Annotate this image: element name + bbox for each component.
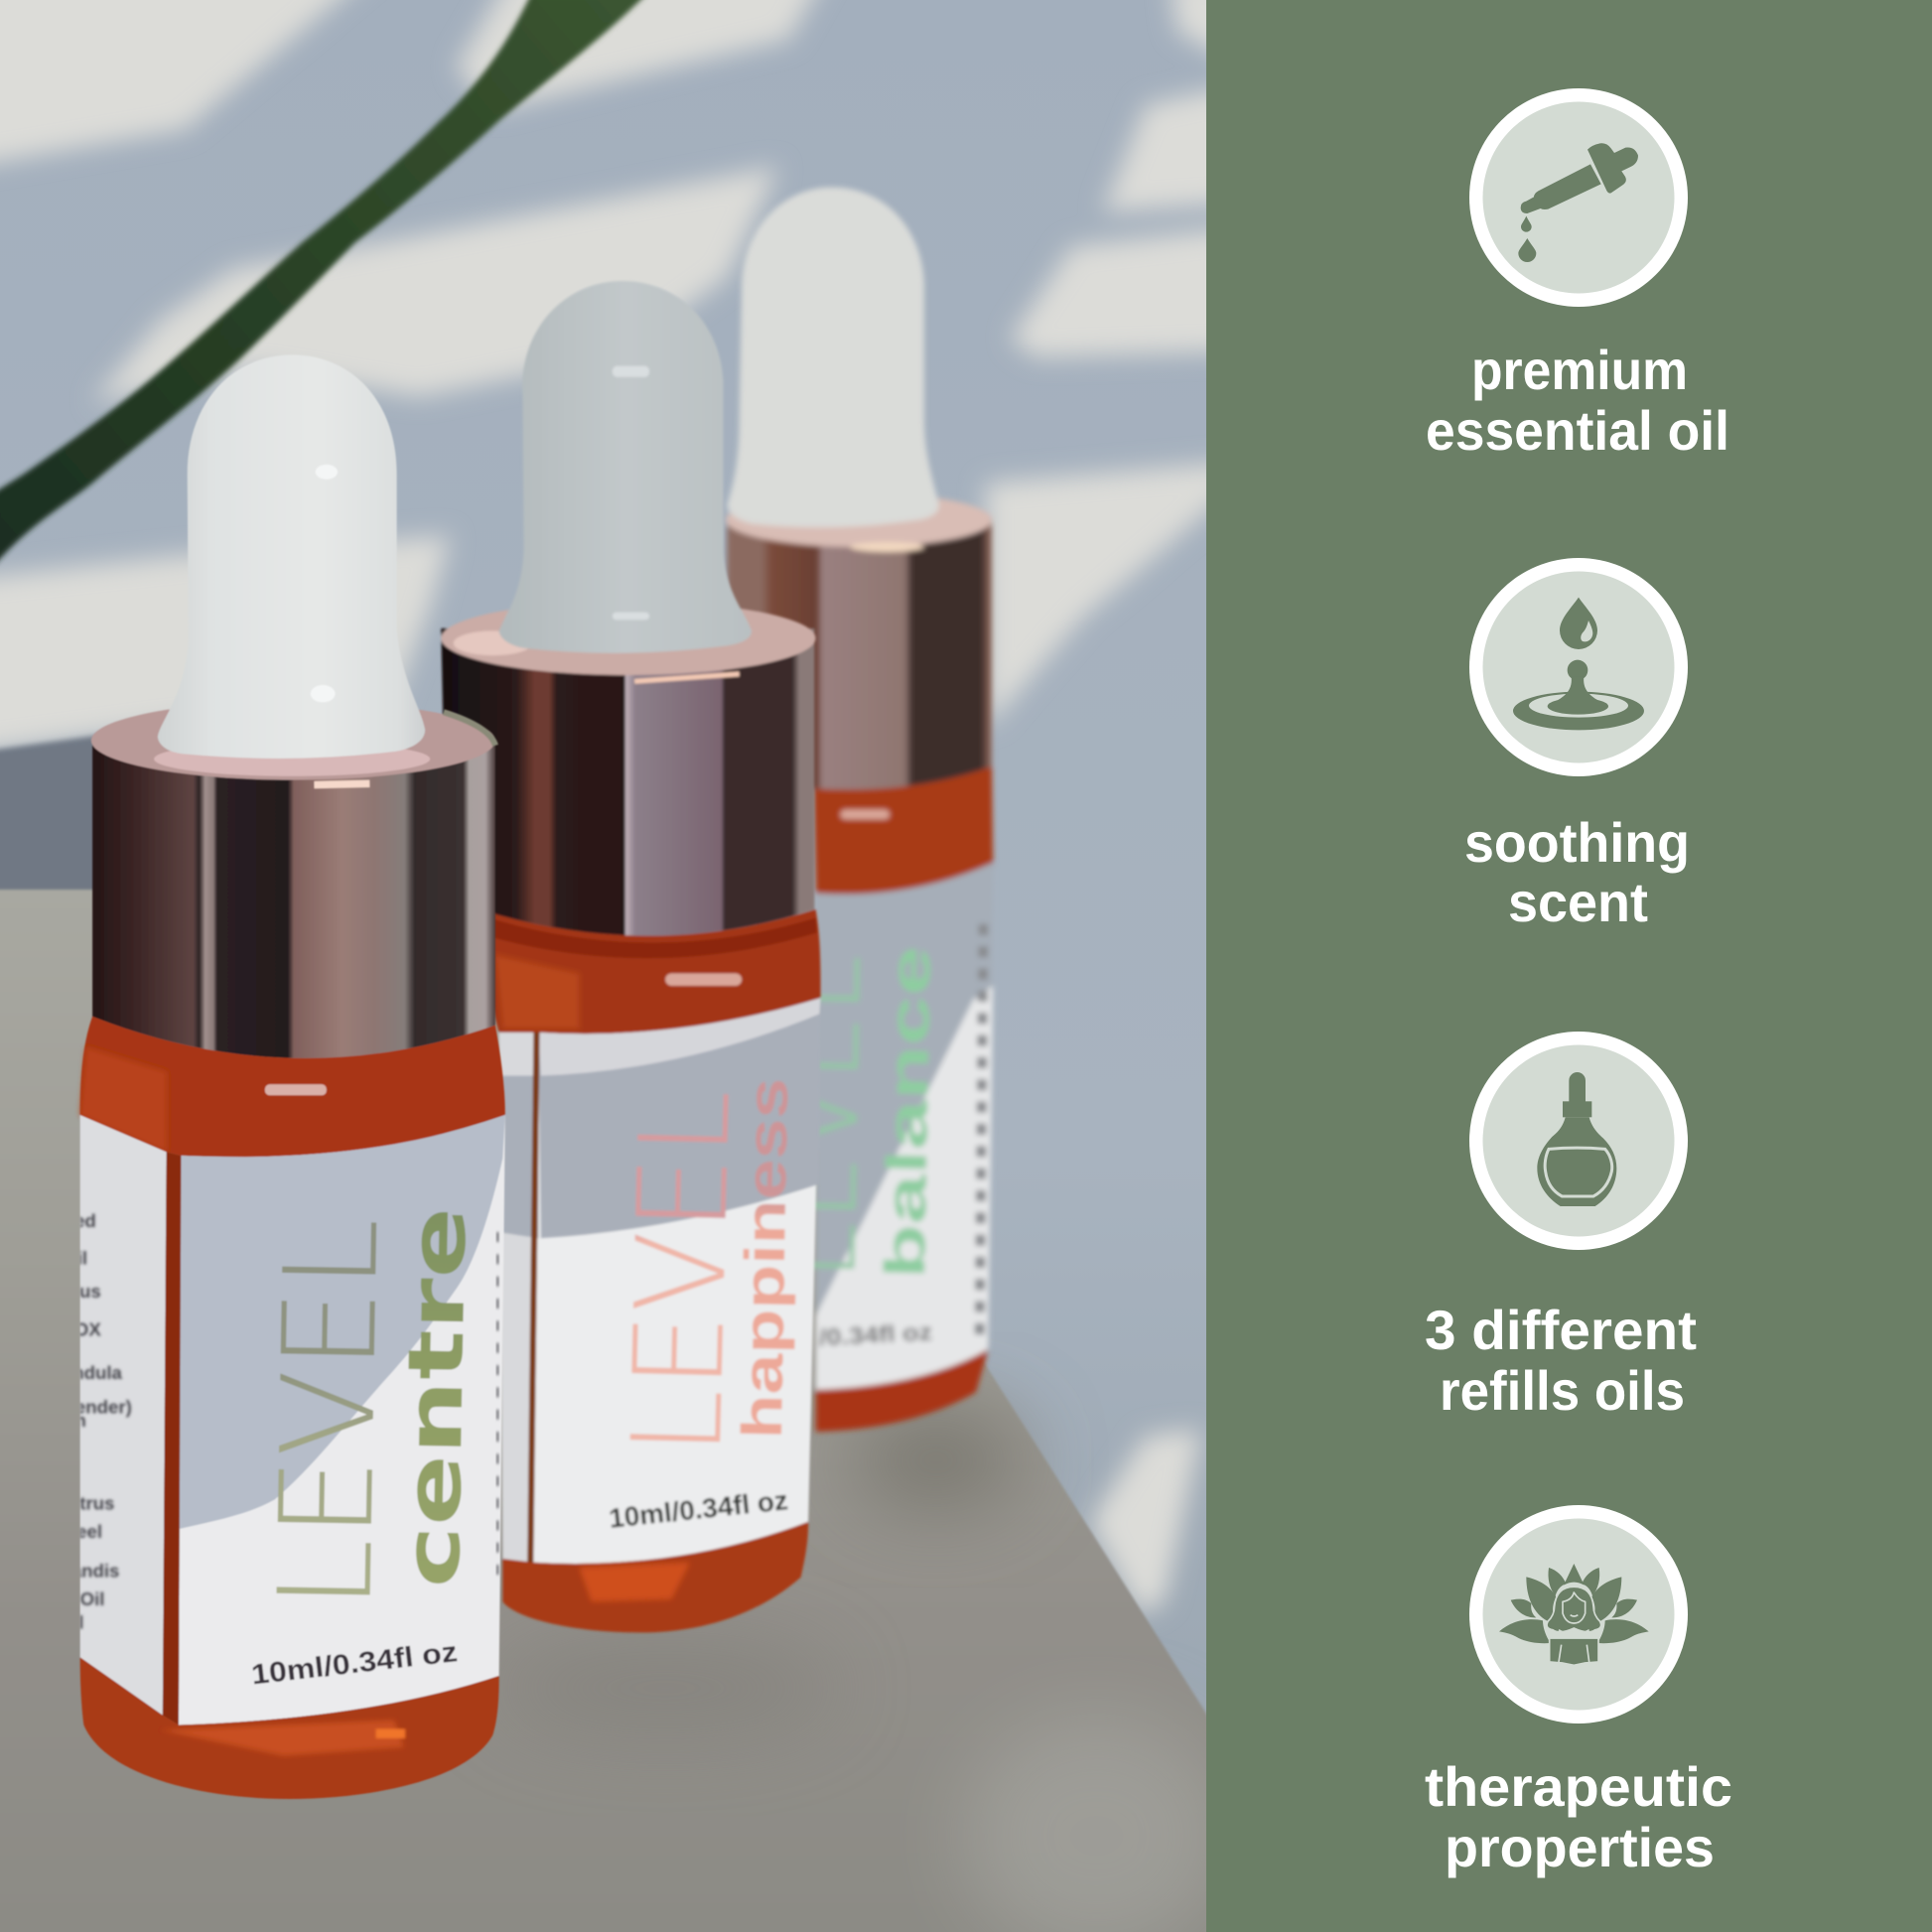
icon: oil bottle	[1469, 1032, 1688, 1250]
label: premium essential oil: premium	[1471, 339, 1688, 401]
front bottle back-label text: (lavender)	[44, 1397, 132, 1418]
rear bottle label	[814, 858, 997, 1312]
table	[0, 890, 1232, 1932]
panel: green features sidebar	[1206, 0, 1932, 1932]
front bottle volume: 10ml/0.34fl oz	[250, 1636, 459, 1691]
front bottle back-label text: il	[77, 1247, 87, 1268]
middle bottle cap	[441, 628, 814, 936]
middle bottle glass base	[502, 1522, 808, 1632]
middle bottle volume: 10ml/0.34fl oz	[608, 1484, 789, 1534]
front bottle back-label text: , Citrus	[51, 1492, 114, 1513]
front bottle back-label text: ulus	[64, 1281, 101, 1302]
feature: 3 different refills oils	[1425, 1032, 1697, 1422]
label: therapeutic properties: therapeutic	[1425, 1755, 1732, 1818]
bottle: centre (front)	[44, 354, 505, 1799]
front bottle glass base	[80, 1657, 499, 1799]
label: 3 different refills oils: 3 different	[1425, 1299, 1697, 1361]
bottle: happiness (middle)	[441, 281, 821, 1632]
bottle: balance (rear)	[726, 188, 993, 1432]
front bottle oil	[80, 1017, 505, 1159]
front bottle label	[179, 1115, 505, 1725]
label: soothing scent: soothing	[1464, 811, 1690, 874]
rear bottle brand: LEVEL	[746, 953, 888, 1282]
front bottle back-label text: n	[74, 1410, 86, 1431]
front bottle back-label text: OX	[74, 1318, 101, 1339]
rear bottle oil	[813, 766, 993, 895]
plant leaf	[0, 0, 647, 566]
middle bottle oil	[486, 909, 821, 1034]
front bottle back-label text: andula	[63, 1362, 123, 1383]
icon: lotus figure	[1469, 1505, 1688, 1724]
front bottle back-label text: nandis	[60, 1561, 119, 1582]
rear bottle dropper bulb	[727, 188, 939, 527]
front bottle cap	[92, 740, 495, 1058]
front bottle back-label text: ed	[74, 1210, 96, 1231]
photo: three dropper bottles on a table	[0, 0, 1232, 1932]
feature: premium essential oil	[1426, 88, 1729, 462]
middle bottle label	[530, 1099, 818, 1567]
front bottle brand: LEVEL	[251, 1216, 407, 1611]
front bottle back-label text: ial Oil	[55, 1588, 104, 1609]
front bottle back-label text	[44, 1210, 132, 1633]
front bottle name: centre	[389, 1206, 483, 1588]
label: soothing scent: scent	[1508, 871, 1648, 933]
icon: dropper	[1469, 88, 1688, 307]
label: therapeutic properties: properties	[1445, 1816, 1715, 1878]
label: 3 different refills oils: refills oils	[1440, 1359, 1685, 1422]
icon: droplet and ripple	[1469, 558, 1688, 776]
feature: therapeutic properties	[1425, 1505, 1732, 1878]
middle bottle name: happiness	[731, 1077, 800, 1440]
label: premium essential oil: essential oil	[1426, 399, 1729, 462]
wall with light and shadow	[0, 0, 1206, 1716]
middle bottle dropper bulb	[499, 281, 752, 653]
rear bottle cap	[727, 517, 992, 801]
middle bottle brand: LEVEL	[607, 1088, 759, 1457]
rear bottle volume: /0.34fl oz	[818, 1318, 933, 1350]
front bottle dropper bulb	[154, 749, 431, 776]
rear bottle name: balance	[874, 945, 943, 1279]
front bottle back-label text: l	[78, 1612, 83, 1633]
feature: soothing scent	[1464, 558, 1690, 933]
front bottle back-label text: Peel	[65, 1521, 102, 1542]
